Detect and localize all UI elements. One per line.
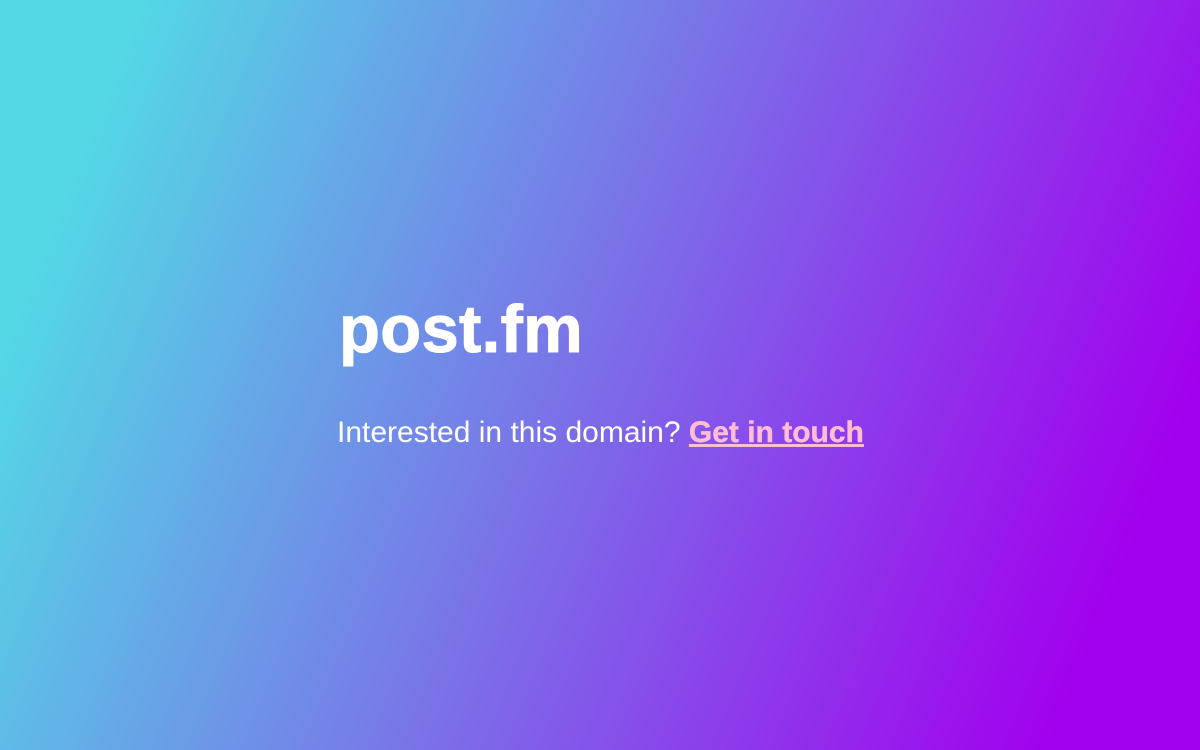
title: post.fm logo: post.fm [339,292,583,367]
text block: domain enquiry: Interested in this domain? Get in touch [337,416,864,449]
